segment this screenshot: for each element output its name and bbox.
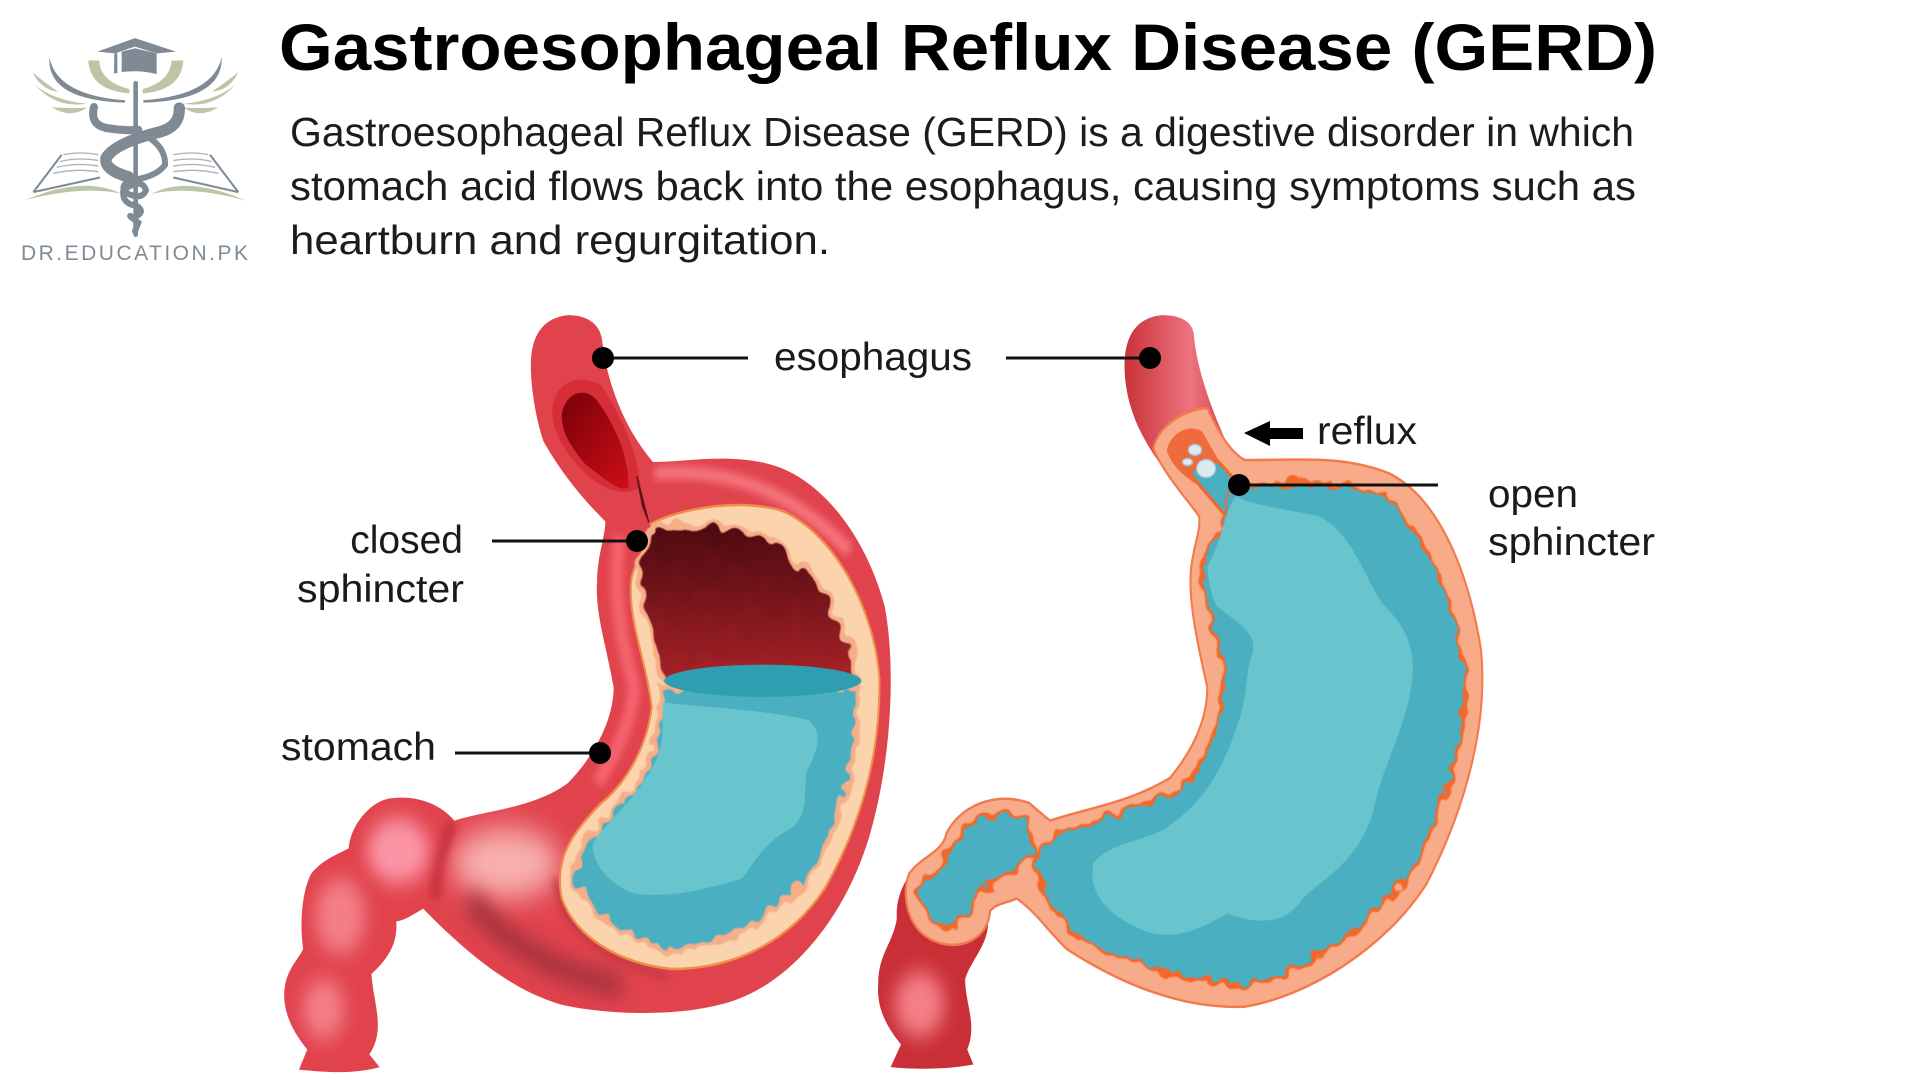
callout: closed sphincter label <box>297 519 648 611</box>
wall shading and highlights <box>303 473 850 1039</box>
acid pool <box>574 687 858 951</box>
logo wordmark: DR.EDUCATION.PK <box>21 242 248 265</box>
callout: esophagus label <box>592 336 1161 379</box>
esophagus opening <box>552 380 641 492</box>
acid surface <box>664 665 861 697</box>
callout: stomach label: stomach <box>281 726 436 769</box>
callout: open sphincter label <box>1228 473 1655 564</box>
description text: Gastroesophageal Reflux Disease (GERD) is a digestive disorder in which <box>290 109 1634 155</box>
logo <box>26 38 246 235</box>
callout: stomach label <box>281 726 611 769</box>
bubbles <box>1182 444 1216 478</box>
callout: open sphincter label: sphincter <box>1488 521 1655 564</box>
icon: caduceus staff and serpents <box>93 83 179 235</box>
description text: heartburn and regurgitation. <box>290 217 830 263</box>
callout: closed sphincter label: closed <box>350 519 463 562</box>
acid highlight <box>593 702 818 895</box>
reflux pocket lining <box>1167 428 1230 501</box>
title: Gastroesophageal Reflux Disease (GERD) <box>279 10 1657 84</box>
icon: open book <box>26 153 246 201</box>
reflux acid tract <box>1189 461 1238 515</box>
icon: graduation cap <box>97 38 176 74</box>
sphincter fold <box>637 476 649 522</box>
diagram: stomach with open sphincter <box>878 315 1482 1069</box>
callout: closed sphincter label: sphincter <box>297 568 464 611</box>
duodenum highlight <box>895 972 944 1037</box>
esophagus <box>1125 315 1245 499</box>
callout: open sphincter label: open <box>1488 473 1578 516</box>
icon: wreath and wings <box>32 57 238 113</box>
description text: stomach acid flows back into the esophagus, causing symptoms such as <box>290 163 1636 209</box>
acid highlight <box>1092 496 1413 935</box>
callout: esophagus label: esophagus <box>774 336 972 379</box>
dark upper cavity <box>638 526 858 682</box>
description text <box>290 109 1636 263</box>
diagram: normal stomach with closed sphincter <box>284 315 891 1072</box>
stomach wall section <box>906 408 1482 1007</box>
duodenum <box>878 846 988 1069</box>
pyloric section with acid <box>919 813 1036 927</box>
stomach lumen with acid <box>1036 483 1466 987</box>
stomach outer wall <box>284 315 891 1072</box>
arrow and reflux label: reflux <box>1317 410 1418 453</box>
arrow and reflux label <box>1244 410 1418 453</box>
cream lining <box>560 505 879 969</box>
